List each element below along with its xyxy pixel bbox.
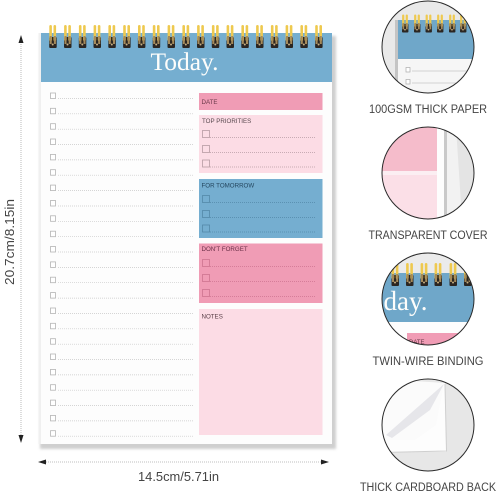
panel: top priorities [199,115,322,173]
feature: cardboard back [360,379,496,492]
caption: TRANSPARENT COVER [368,230,488,242]
panel: date [199,93,322,110]
detail circle: cover [382,127,474,219]
paper sheet [38,33,332,444]
header band [41,33,332,82]
caption: TWIN-WIRE BINDING [372,356,484,368]
height dimension arrow [18,35,24,443]
panel: notes: NOTES [202,314,223,320]
height label: 20.7cm/8.15in [2,199,17,285]
feature: transparent cover [368,127,488,242]
caption: 100GSM THICK PAPER [369,104,487,116]
panel: top priorities: TOP PRIORITIES [202,118,251,125]
page surface [41,33,332,444]
daily checklist rows [50,93,193,436]
detail circle: paper [382,1,474,93]
spiral binding [49,25,323,48]
width dimension arrow [38,460,329,464]
panel: don't forget: DON'T FORGET [202,246,248,253]
panel: date: DATE [202,99,218,106]
feature: twin-wire binding [370,253,484,368]
panel: don't forget [199,244,322,303]
feature: thick paper [369,1,487,116]
detail circle: cardboard [382,379,474,471]
notepad [38,25,336,449]
detail circle: binding: oday. [370,286,427,316]
pad shadow [40,36,336,449]
panel: notes [199,309,322,435]
detail circle: binding: DATE [409,340,425,346]
panel: for tomorrow [199,179,322,238]
panel: for tomorrow: FOR TOMORROW [202,182,254,190]
detail circle: binding [382,252,474,346]
width label: 14.5cm/5.71in [138,470,219,484]
title: Today. [150,47,218,76]
